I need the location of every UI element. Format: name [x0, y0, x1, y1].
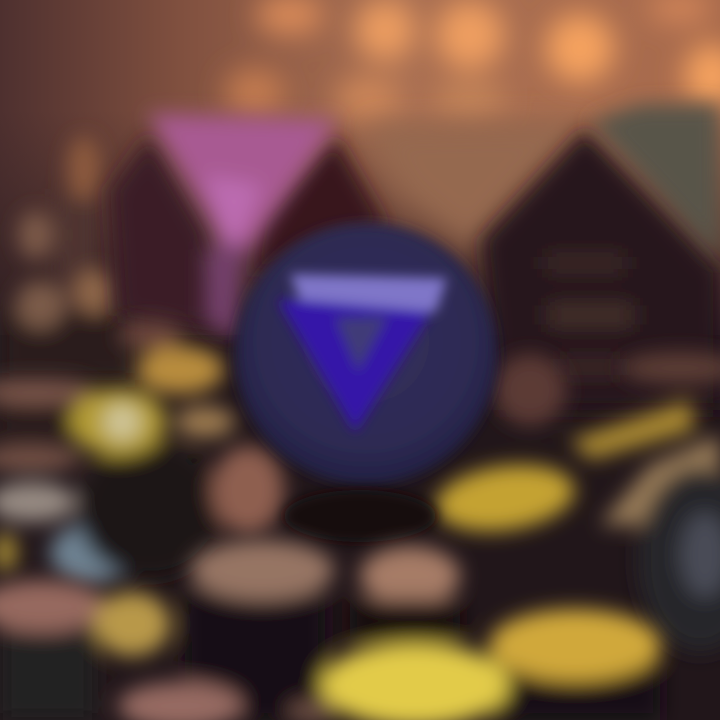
house: dark right with grey-green roof: [482, 104, 720, 410]
lavender top bar: [290, 274, 447, 312]
house: beige middle roof: [365, 120, 590, 250]
coin stacks: bottom row: [0, 540, 661, 720]
grey-green roof: [590, 104, 720, 262]
sphere body: [235, 223, 497, 485]
left distant towers: [0, 136, 135, 380]
house body, dark maroon: [110, 135, 388, 335]
coin stacks: left column: [0, 321, 284, 583]
bokeh lights: [225, 0, 720, 120]
coin stacks: right side: [431, 352, 720, 652]
pink triangular roof: [148, 114, 338, 340]
blue inverted triangle emblem: [278, 274, 447, 432]
sphere pedestal: [284, 490, 436, 542]
house: pink roof, left: [110, 114, 388, 340]
token sphere: [235, 223, 497, 485]
